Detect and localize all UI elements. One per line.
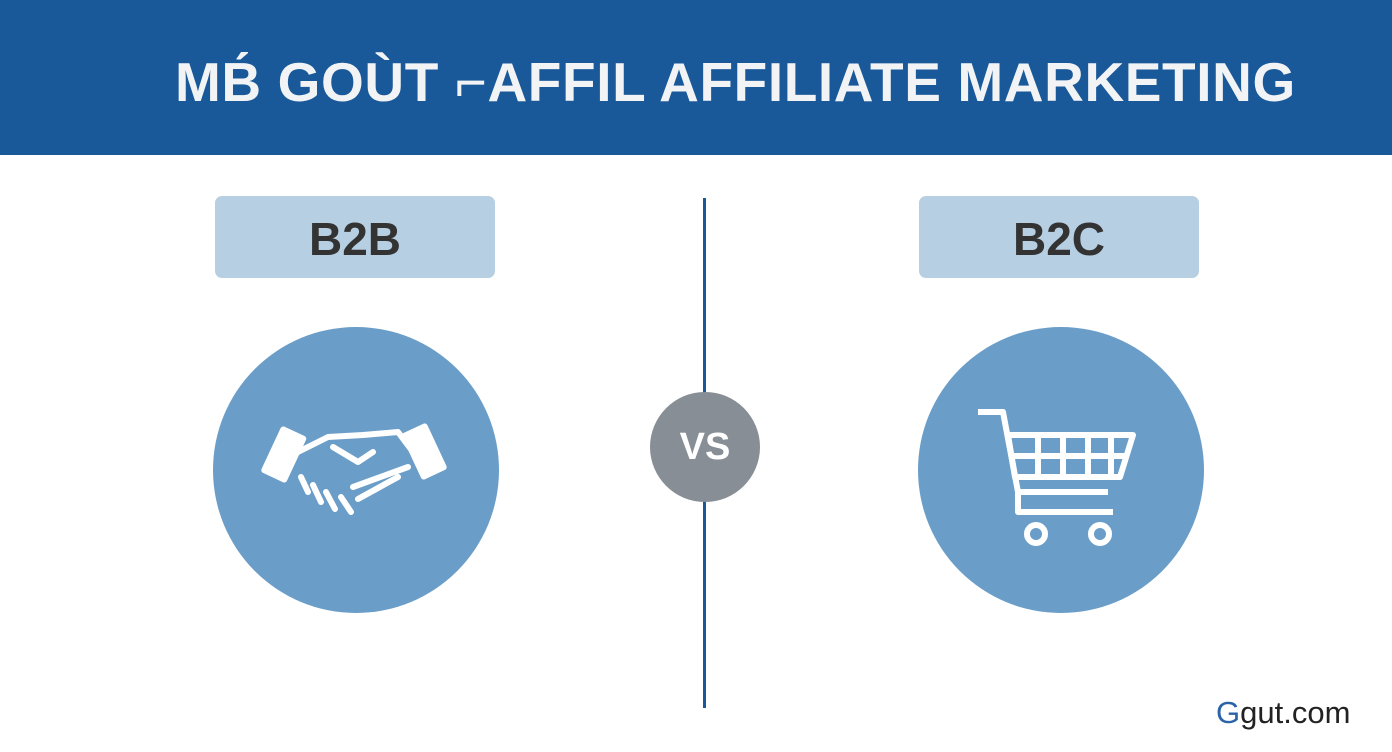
logo: Ggut.com [1216, 695, 1350, 730]
divider line [703, 198, 706, 708]
vs badge: VS [680, 426, 730, 468]
header banner [0, 0, 1392, 155]
label: B2B: B2B [309, 213, 401, 265]
label: B2C [919, 196, 1199, 278]
vs badge [650, 392, 760, 502]
label: B2C: B2C [1013, 213, 1105, 265]
label: B2B [215, 196, 495, 278]
icon: shopping cart circle [918, 327, 1204, 613]
icon: handshake circle [213, 327, 499, 613]
title: MB́ GOÙT ⌐AFFIL AFFILIATE MARKETING [175, 51, 1296, 113]
